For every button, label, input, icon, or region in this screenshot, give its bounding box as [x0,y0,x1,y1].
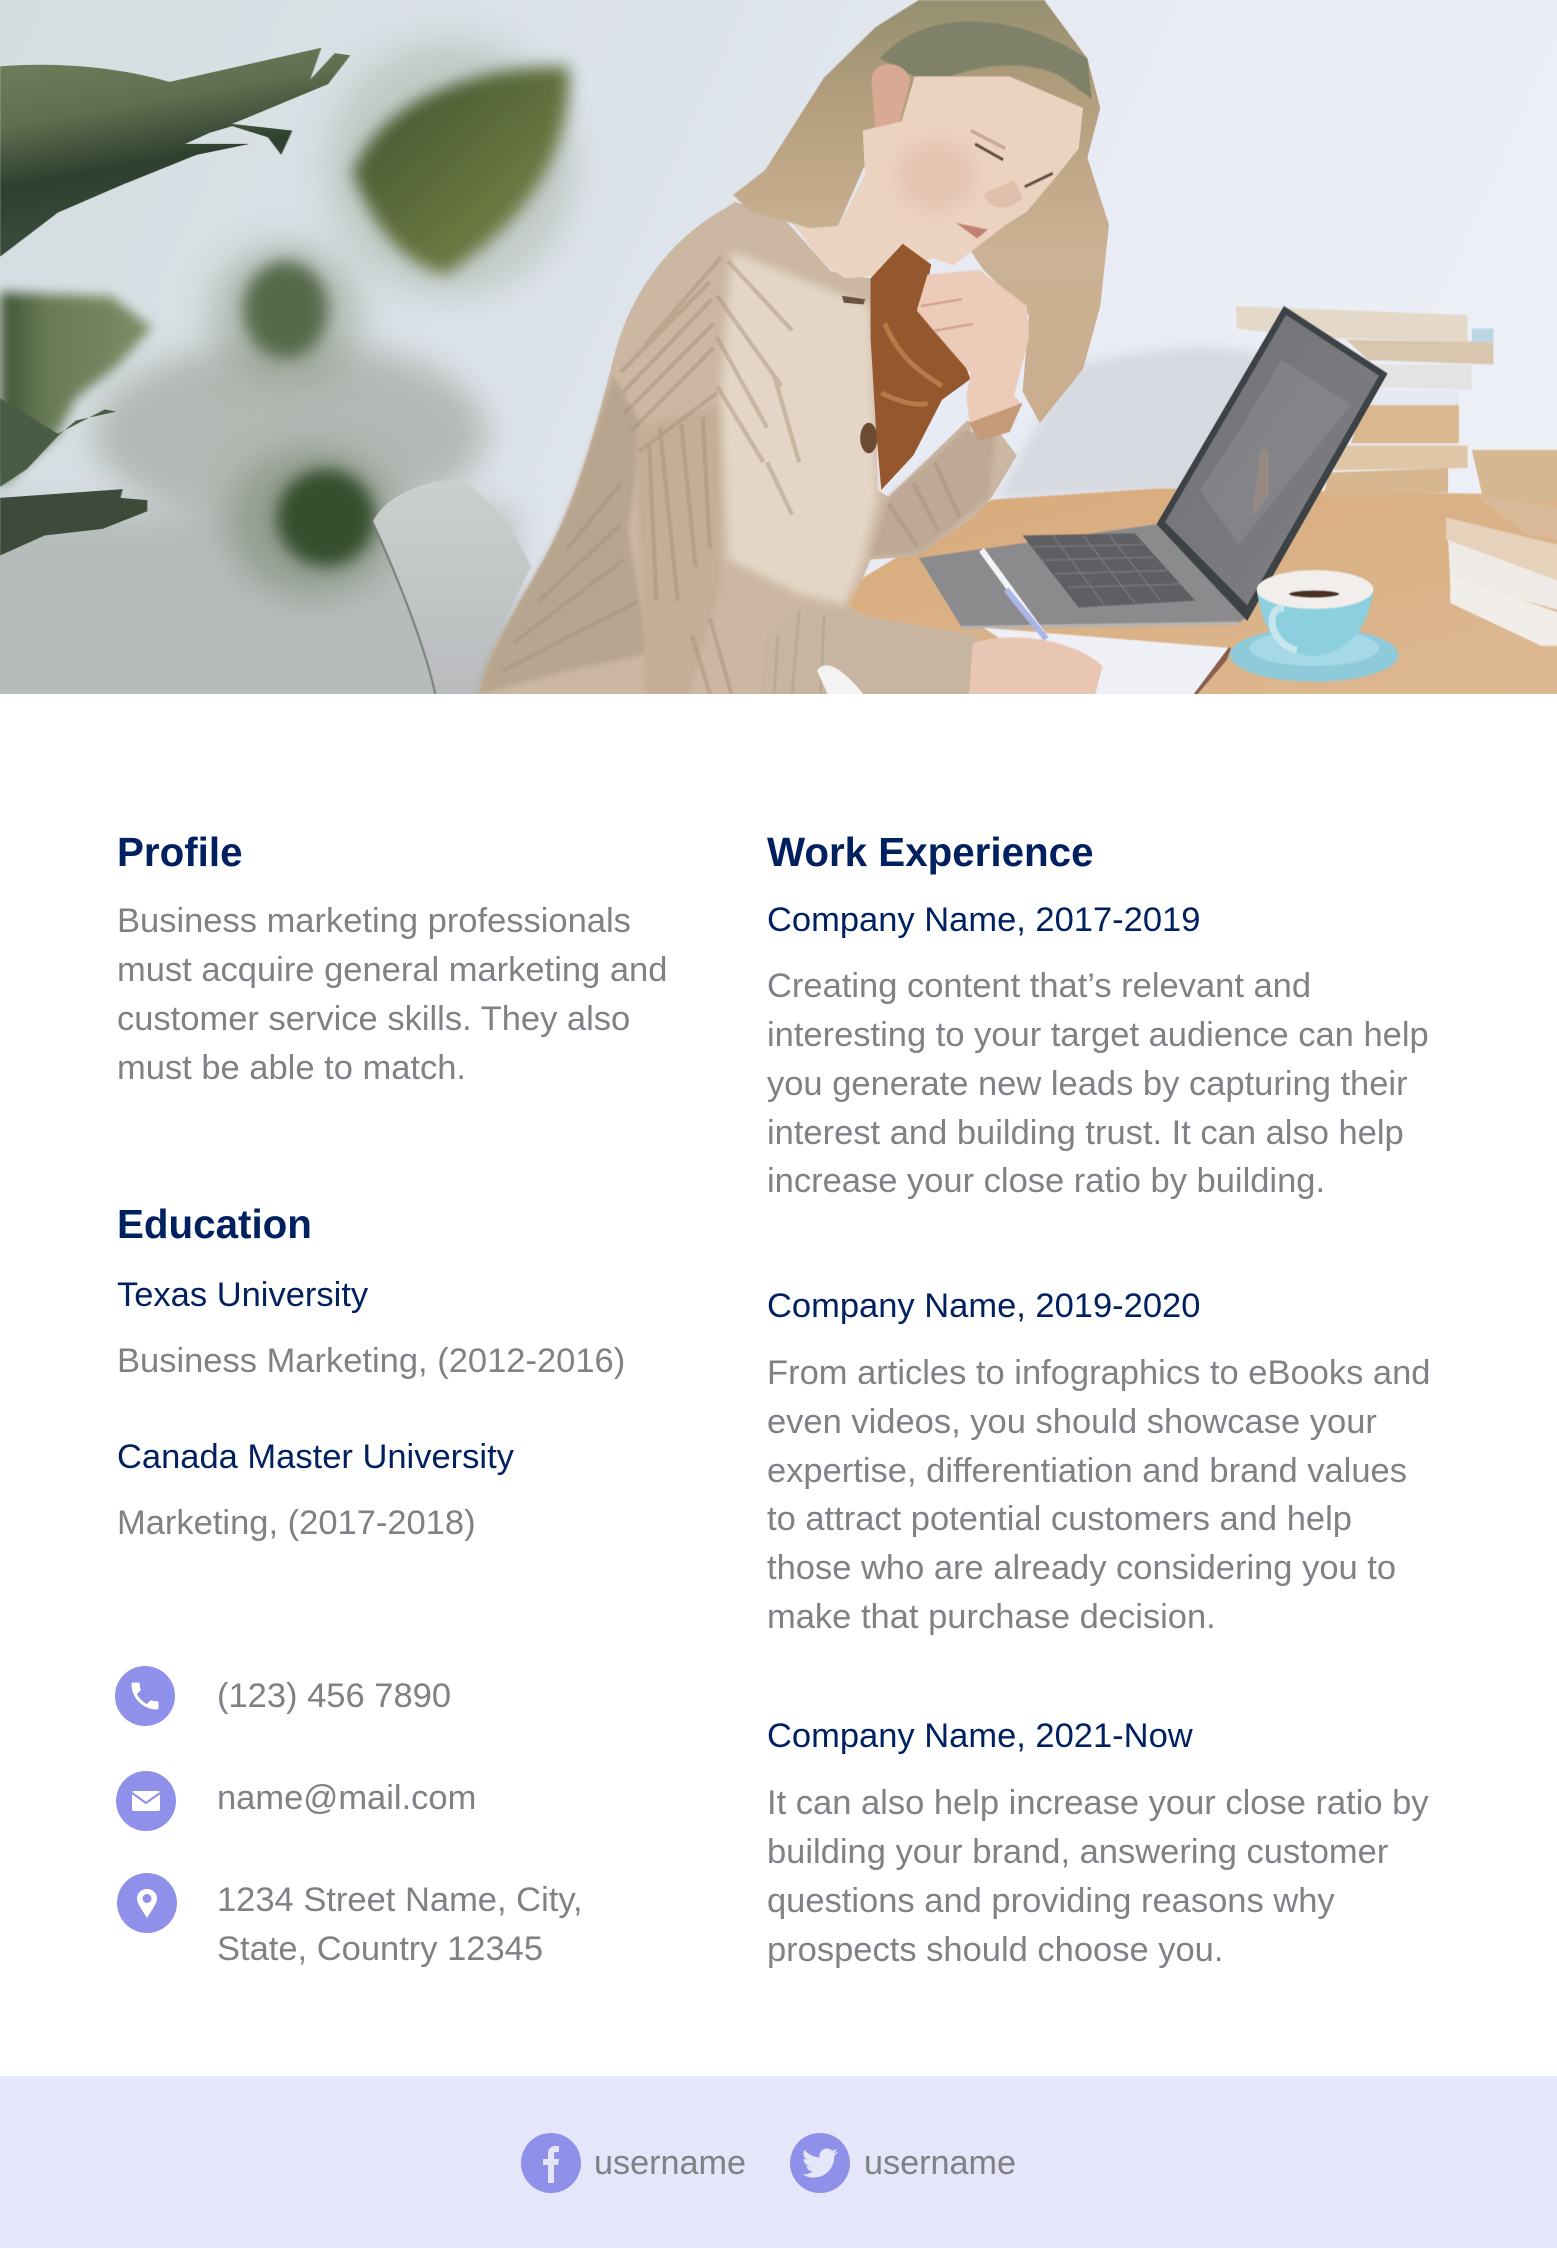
job 1 title: Company Name, 2017-2019 [767,901,1200,939]
email address: name@mail.com [217,1779,476,1817]
street address: State, Country 12345 [217,1930,543,1968]
job 1 description: interest and building trust. It can also help [767,1114,1404,1152]
heading: work experience: Work Experience [767,829,1094,875]
icon: mail [116,1771,176,1831]
job 3 description: building your brand, answering customer [767,1833,1388,1871]
job 2 [767,1287,1430,1636]
phone number: (123) 456 7890 [217,1677,451,1715]
laptop [919,306,1388,628]
job 2 description [767,1354,1430,1636]
school: Texas University: Texas University [117,1276,368,1314]
profile text: customer service skills. They also [117,1000,630,1038]
stacked books [1236,306,1557,646]
job 3 description: questions and providing reasons why [767,1882,1335,1920]
job 2 title: Company Name, 2019-2020 [767,1287,1200,1325]
notebook, pen and writing hand [969,550,1230,700]
job 3 description [767,1784,1429,1969]
job 1 description: Creating content that’s relevant and [767,967,1311,1005]
hero photo: woman writing at desk with laptop [0,0,1557,694]
job 3 description: It can also help increase your close ratio by [767,1784,1429,1822]
job 1 [767,901,1429,1200]
job 2 description: expertise, differentiation and brand values [767,1452,1407,1490]
job 3 [767,1717,1429,1969]
job 1 description: increase your close ratio by building. [767,1162,1325,1200]
job 2 description: to attract potential customers and help [767,1500,1352,1538]
panel: contact details [115,1666,583,1968]
degree: business marketing: Business Marketing, (2012-2016) [117,1342,625,1380]
icon: location pin [117,1873,177,1933]
hand at chin [917,270,1029,432]
facebook username: username [594,2144,746,2182]
coffee cup and saucer [1230,570,1398,682]
job 1 description [767,967,1429,1200]
street address: 1234 Street Name, City, [217,1881,583,1919]
job 2 description: those who are already considering you to [767,1549,1396,1587]
footer band with social handles [0,2076,1557,2248]
icon: twitter [790,2133,850,2193]
school: Canada Master University: Canada Master University [117,1438,514,1476]
icon: phone [115,1666,175,1726]
degree: marketing: Marketing, (2017-2018) [117,1504,476,1542]
job 2 description: even videos, you should showcase your [767,1403,1377,1441]
job 1 description: you generate new leads by capturing their [767,1065,1408,1103]
panel: profile [117,829,667,1087]
profile text [117,902,667,1087]
job 1 description: interesting to your target audience can help [767,1016,1429,1054]
job 3 description: prospects should choose you. [767,1931,1223,1969]
twitter username: username [864,2144,1016,2182]
profile text: must acquire general marketing and [117,951,667,989]
woman: sweater, hair, face, hand [480,0,1109,694]
desk [772,348,1557,700]
long blonde hair [733,0,1109,423]
profile text: must be able to match. [117,1049,466,1087]
job 2 description: From articles to infographics to eBooks and [767,1354,1430,1392]
job 2 description: make that purchase decision. [767,1598,1216,1636]
panel: work experience [767,829,1430,1969]
heading: education: Education [117,1201,312,1247]
panel: education [117,1201,625,1542]
icon: facebook [521,2133,581,2193]
heading: profile: Profile [117,829,242,875]
job 3 title: Company Name, 2021-Now [767,1717,1193,1755]
profile text: Business marketing professionals [117,902,631,940]
street address [217,1881,583,1968]
blurred plant and sharp leaves [0,40,576,775]
